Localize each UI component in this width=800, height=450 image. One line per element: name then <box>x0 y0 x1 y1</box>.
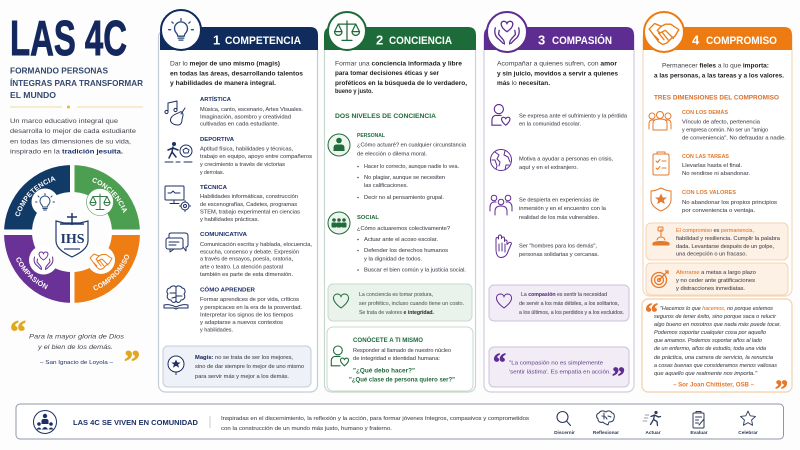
item: artística <box>165 95 303 128</box>
callout: conócete a ti mismo: "¿Qué debo hacer?" <box>353 368 415 374</box>
quote: Sor Joan Chittister: seguros de tener éxito, sino porque saca o relucir <box>654 314 777 320</box>
header band <box>160 10 318 50</box>
intro: proféticos en la búsqueda de lo verdadero, <box>335 80 467 87</box>
header band: COMPROMISO <box>706 35 777 47</box>
intro: y habilidades de manera integral. <box>170 80 276 87</box>
subtitle: ÍNTEGRAS PARA TRANSFORMAR <box>10 77 143 88</box>
item: crisis: aquí y en el extranjero. <box>519 165 578 171</box>
callout: metas <box>646 263 788 295</box>
level: social: Defender los derechos humanos <box>364 248 448 254</box>
wheel diagram: COMPETENCIA <box>15 176 56 216</box>
intro: Acompañar a quienes sufren, con amor <box>497 60 618 68</box>
header band: 3 <box>538 32 545 48</box>
callout: conócete a ti mismo: CONÓCETE A TI MISMO <box>353 336 423 344</box>
quote: Sor Joan Chittister: – Sor Joan Chittister, OSB – <box>673 382 755 388</box>
level: personal: Decir no al pensamiento grupal. <box>364 195 444 201</box>
callout: compasión: a los últimos, a los perdidos y a los excluidos. <box>519 310 624 316</box>
heading: DOS NIVELES DE CONCIENCIA <box>335 113 436 120</box>
dimension: con los valores: No abandonar los propios principios <box>682 200 777 206</box>
footer band <box>16 404 784 439</box>
action: evaluar <box>690 412 708 436</box>
quote: San Ignacio: ” <box>124 343 140 379</box>
item: comunicativa <box>166 232 312 278</box>
callout: postura: La conciencia es tomar postura, <box>359 292 433 298</box>
callout: magis: para servir más y mejor a los demás. <box>195 374 289 380</box>
item: crisis: Motiva a ayudar a personas en crisis, <box>519 156 613 162</box>
item: escolar: en la comunidad escolar. <box>519 122 581 128</box>
footer text: con la construcción de un mundo más justo, humano y fraterno. <box>221 426 392 432</box>
callout: metas: y no ceder ante gratificaciones <box>676 278 755 284</box>
wheel diagram: COMPASIÓN <box>16 257 48 290</box>
panel: conciencia <box>324 12 476 392</box>
action: celebrar: Celebrar <box>738 430 758 436</box>
item: deportiva: y derrotas. <box>200 170 224 176</box>
panel: competencia <box>158 10 318 392</box>
quote: Sor Joan Chittister: "Hacemos lo que hacemos, no porque estemos <box>660 306 773 312</box>
quote: San Ignacio <box>10 313 140 379</box>
item: artística: cultivadas en cada estudiante. <box>200 122 279 128</box>
header band: CONCIENCIA <box>389 35 452 47</box>
quote: Sor Joan Chittister: de práctica, una carrera de servicio, la renuncia <box>654 355 773 361</box>
quote: San Ignacio: Para la mayor gloria de Dios <box>29 334 125 340</box>
item: crisis <box>490 150 613 171</box>
callout: permanencia: una decepción o un fracaso. <box>676 252 747 258</box>
item: inmersión: Se despierta en experiencias de <box>519 198 599 204</box>
dimension: con los demás: de conveniencia". No defraudar a nadie. <box>682 136 786 142</box>
callout: permanencia <box>646 223 788 260</box>
item: deportiva: Aptitud física, habilidades y técnicas, <box>200 146 293 152</box>
callout: conócete a ti mismo: Responder al llamado de nuestro núcleo <box>353 348 451 354</box>
quote: Sor Joan Chittister: algo bueno en nosotros que nada más puede tocar. <box>654 322 781 328</box>
callout: quote: 'sentir lástima'. Es empatía en acción. <box>509 370 611 376</box>
callout: conócete a ti mismo: "¿Qué clase de persona quiero ser?" <box>349 376 455 384</box>
item: escolar: Se expresa ante el sufrimiento y la pérdida <box>519 114 628 120</box>
level: personal: Hacer lo correcto, aunque nadie lo vea. <box>364 164 459 170</box>
dimension: con los demás: CON LOS DEMÁS <box>682 109 728 116</box>
item: cómo aprender: CÓMO APRENDER <box>200 286 256 294</box>
intro paragraph: Un marco educativo integral que <box>10 118 119 125</box>
item: comunicativa: escucha, consenso y debate. Expresión <box>200 250 299 256</box>
callout: compasión: de servir a los más débiles, a los solitarios, <box>519 301 619 307</box>
item: deportiva <box>165 137 312 176</box>
intro paragraph: desarrolla lo mejor de cada estudiante <box>10 128 137 135</box>
action: discernir <box>554 412 575 436</box>
item: técnica: y habilidades prácticas. <box>200 217 259 223</box>
callout: compasión <box>489 285 629 321</box>
quote: Sor Joan Chittister: que amamos. Podemos soportar años al lado <box>654 338 762 344</box>
item: hombres para los demás: personas solidarias y cercanas. <box>519 252 599 258</box>
callout: metas: Aferrarse a metas a largo plazo <box>676 270 756 276</box>
intro: y sin juicio, movidos a servir a quienes <box>497 70 618 78</box>
quote: Sor Joan Chittister: de un enfermo, años de estudio, toda una vida <box>654 346 766 352</box>
item: artística: Música, canto, escenario, Artes Visuales. <box>200 107 303 113</box>
intro: para tomar decisiones éticas y ser <box>335 70 440 77</box>
footer title: LAS 4C SE VIVEN EN COMUNIDAD <box>73 418 199 427</box>
item: artística: Imaginación, asombro y creatividad <box>200 114 291 120</box>
quote: Sor Joan Chittister: ” <box>775 375 788 404</box>
callout: quote: "La compasión no es simplemente <box>509 360 603 366</box>
level: social: ¿Cómo actuaremos colectivamente? <box>357 226 450 232</box>
quote: Sor Joan Chittister: “ <box>645 298 658 327</box>
quote: Sor Joan Chittister: a cosas buenas que consideramos menos valiosas <box>654 363 777 369</box>
item: técnica: de escenografías, Cadetes, programas <box>200 202 297 208</box>
item: técnica: STEM, trabajo experimental en ciencias <box>200 210 300 216</box>
icon: IHS shield: IHS <box>60 232 85 247</box>
dimension: con las tareas: CON LAS TAREAS <box>682 154 729 160</box>
title: LAS 4C <box>10 12 127 66</box>
callout: quote: “ <box>493 348 506 377</box>
wheel diagram <box>4 165 140 303</box>
action: discernir: Discernir <box>554 430 575 436</box>
subtitle: EL MUNDO <box>10 90 56 100</box>
quote: Sor Joan Chittister <box>642 298 792 404</box>
callout: conócete a ti mismo: de integridad e identidad humana: <box>353 356 440 362</box>
item: cómo aprender: y habilidades. <box>200 328 233 334</box>
dimension: con las tareas: Llevarlas hasta el final. <box>682 163 742 169</box>
action: actuar <box>643 411 661 436</box>
callout: quote: ” <box>612 362 625 391</box>
level: personal: de elección o dilema moral. <box>357 152 427 158</box>
intro: Formar una conciencia informada y libre <box>335 60 462 68</box>
intro: bueno y justo. <box>335 88 373 95</box>
intro: a las personas, a las tareas y a los valores. <box>654 72 784 80</box>
callout: magis: sino de dar siempre lo mejor de uno mismo <box>195 364 304 370</box>
intro paragraph: en todas las dimensiones de su vida, <box>10 138 131 146</box>
intro <box>335 60 467 95</box>
item: deportiva: trabajo en equipo, apoyo entre compañeros <box>200 154 312 160</box>
item: hombres para los demás: Ser "hombres para los demás", <box>519 244 597 250</box>
quote: San Ignacio: – San Ignacio de Loyola – <box>40 360 114 366</box>
level: personal: las calificaciones. <box>364 183 408 189</box>
callout: metas: y distracciones inmediatas. <box>676 286 745 292</box>
header band: 4 <box>692 32 700 48</box>
level: social: SOCIAL <box>357 215 379 221</box>
item: escolar <box>492 104 628 128</box>
item: cómo aprender: y perspicaces en la era de la posverdad. <box>200 305 302 311</box>
action: reflexionar: Reflexionar <box>593 430 619 436</box>
intro: más lo necesitan. <box>497 80 550 87</box>
dimension: con los valores <box>651 188 777 214</box>
dimension: con los demás <box>649 109 786 142</box>
dimension: con las tareas <box>653 152 750 177</box>
item: comunicativa: COMUNICATIVA <box>200 232 248 238</box>
item: técnica <box>165 183 300 223</box>
panel: compromiso <box>642 12 792 404</box>
dimension: con los demás: Vínculo de afecto, pertenencia <box>682 120 761 126</box>
level: personal: PERSONAL <box>357 133 385 139</box>
dimension: con las tareas: No rendirse ni abandonar. <box>682 171 750 177</box>
level: personal <box>328 133 467 201</box>
item: comunicativa: arte o teatro. La atención pastoral <box>200 264 283 270</box>
item: inmersión <box>490 195 607 221</box>
item: artística: ARTÍSTICA <box>200 95 232 103</box>
header band: COMPASIÓN <box>552 34 612 47</box>
callout: permanencia: El compromiso es permanencia, <box>676 228 754 234</box>
level: social: y la dignidad de todos. <box>364 256 422 262</box>
item: deportiva: DEPORTIVA <box>200 137 235 143</box>
item: hombres para los demás <box>496 235 599 258</box>
item: comunicativa: a través de ensayos, poesía, oratoria, <box>200 256 293 262</box>
quote: San Ignacio: y el bien de los demás. <box>37 344 113 351</box>
intro: en todas las áreas, desarrollando talentos <box>170 70 303 78</box>
intro: Permanecer fieles a lo que importa: <box>662 62 769 70</box>
intro <box>170 60 303 87</box>
callout: compasión: La compasión es sentir la necesidad <box>521 292 607 298</box>
callout: postura: Se trata de valores e integridad. <box>359 310 434 316</box>
level: social: Actuar ante el acoso escolar. <box>364 237 438 243</box>
header band: COMPETENCIA <box>225 35 301 47</box>
item: cómo aprender: Interpretar los signos de los tiempos <box>200 312 293 318</box>
header band <box>484 12 634 52</box>
callout: quote <box>489 347 629 391</box>
item: cómo aprender <box>164 286 302 334</box>
callout: postura: ser profético, incluso cuando tiene un costo. <box>359 301 464 307</box>
item: comunicativa: también es parte de esta dimensión. <box>200 272 293 278</box>
callout: magis <box>163 346 311 387</box>
intro paragraph <box>10 118 137 156</box>
item: comunicativa: Comunicación escrita y hablada, elocuencia, <box>200 242 312 248</box>
header band <box>324 12 476 50</box>
item: cómo aprender: Formar aprendices de por vida, críticos <box>200 297 299 303</box>
dimension: con los valores: por conveniencia o ventaja. <box>682 208 755 214</box>
action: celebrar <box>738 411 758 436</box>
header band: 2 <box>376 32 383 48</box>
footer text <box>221 416 529 432</box>
footer text: Inspiradas en el discernimiento, la reflexión y la acción, para formar jóvenes íntegros, compasivos y comprometidos <box>221 416 529 422</box>
callout: permanencia: dada. Levantarse después de un golpe, <box>676 244 774 250</box>
action: reflexionar <box>593 411 619 436</box>
intro paragraph: inspirado en la tradición jesuita. <box>10 148 123 156</box>
quote: Sor Joan Chittister: que aquello que realmente nos importa." <box>654 371 758 377</box>
wheel diagram: CONCIENCIA <box>92 178 127 214</box>
action: evaluar: Evaluar <box>690 430 708 436</box>
icon: IHS shield <box>56 213 88 257</box>
header band: 1 <box>213 32 220 48</box>
heading: TRES DIMENSIONES DEL COMPROMISO <box>654 94 779 102</box>
icon: community <box>34 410 56 434</box>
dimension: con los valores: CON LOS VALORES <box>682 190 736 196</box>
action: actuar: Actuar <box>645 430 661 436</box>
item: técnica: TÉCNICA <box>200 183 228 191</box>
intro: Dar lo mejor de uno mismo (magis) <box>170 60 280 68</box>
callout: permanencia: fiabilidad y resiliencia. Cumplir la palabra <box>676 236 781 242</box>
item: inmersión: inmersión y en el encuentro con la <box>519 206 607 212</box>
quote: Sor Joan Chittister: Podemos soportar cualquier cosa por aquello <box>654 330 766 336</box>
callout: postura <box>328 284 472 321</box>
item: cómo aprender: y adaptarse a nuevos contextos <box>200 320 283 326</box>
level: personal: No plagiar, aunque se necesiten <box>364 175 445 181</box>
level: social: Buscar el bien común y la justicia social. <box>364 268 466 274</box>
item: inmersión: realidad de los más vulnerables. <box>519 215 599 221</box>
intro <box>497 60 618 87</box>
header band <box>643 12 792 52</box>
item: técnica: Habilidades informáticas, construcción <box>200 194 298 200</box>
intro <box>654 62 784 80</box>
callout: magis: Magis: no se trata de ser los mejores, <box>195 355 293 361</box>
quote: San Ignacio: “ <box>10 313 26 349</box>
level: personal: ¿Cómo actuaré? en cualquier circunstancia <box>357 142 467 148</box>
panel: compasión <box>484 12 634 392</box>
subtitle <box>10 66 143 100</box>
dimension: con los demás: y empresa común. No ser un "amigo <box>682 128 768 134</box>
callout: conócete a ti mismo <box>327 327 473 391</box>
subtitle: FORMANDO PERSONAS <box>10 66 108 76</box>
wheel diagram: COMPROMISO <box>93 254 129 290</box>
level: social <box>328 212 466 274</box>
item: deportiva: y crecimiento a través de victorias <box>200 162 285 168</box>
